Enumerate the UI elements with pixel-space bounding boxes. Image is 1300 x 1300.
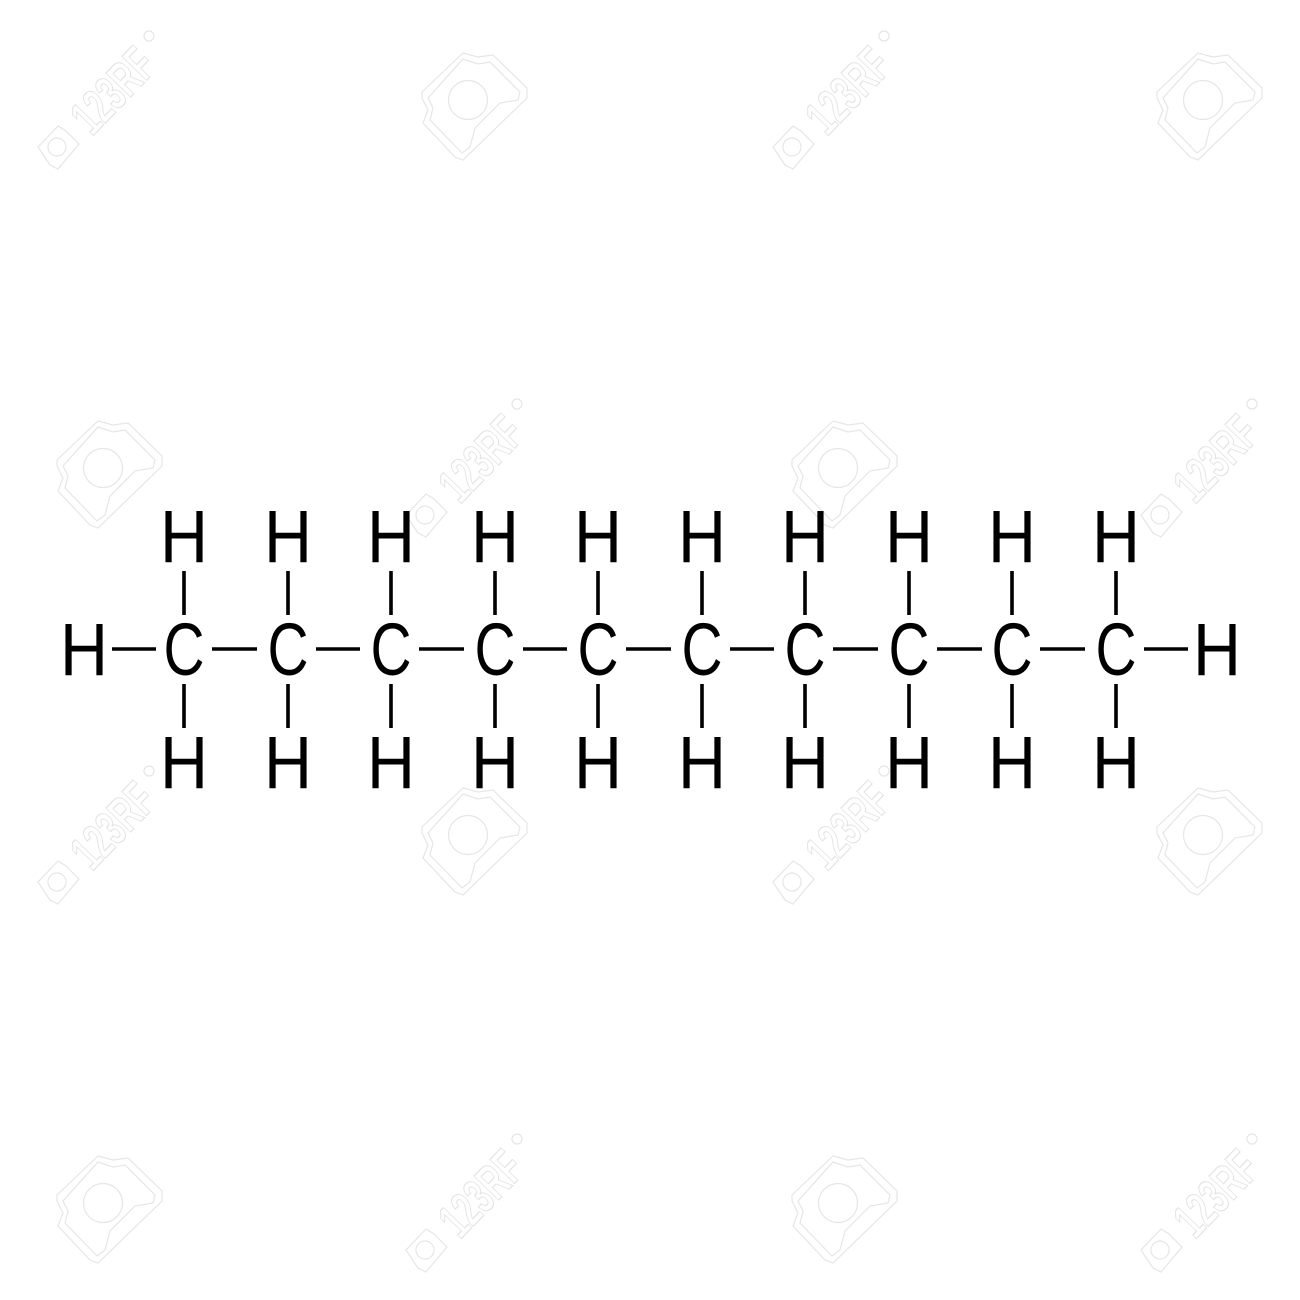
bottom hydrogen row	[160, 721, 1140, 804]
carbon chain row with terminal hydrogens: H	[1193, 608, 1241, 691]
carbon chain row with terminal hydrogens: C	[268, 608, 308, 691]
top hydrogen row: H	[988, 495, 1036, 578]
watermark: egg row 3 centre	[422, 788, 527, 895]
top hydrogen row: H	[471, 495, 519, 578]
bottom hydrogen row: H	[574, 721, 622, 804]
bonds	[112, 571, 1188, 728]
bottom hydrogen row: H	[471, 721, 519, 804]
watermark: wordmark row 2 centre	[406, 399, 535, 537]
watermark: egg far top right	[1157, 53, 1262, 160]
watermark: wordmark top right	[773, 31, 902, 169]
top hydrogen row: H	[264, 495, 312, 578]
watermark: wordmark row 3 right: 123RF	[795, 772, 902, 880]
watermark: wordmark row 3 left: 123RF	[60, 772, 167, 880]
top hydrogen row: H	[781, 495, 829, 578]
carbon chain row with terminal hydrogens: C	[1096, 608, 1136, 691]
watermark: egg row 3 far right	[1157, 788, 1262, 895]
bottom hydrogen row: H	[988, 721, 1036, 804]
carbon chain row with terminal hydrogens: C	[578, 608, 618, 691]
carbon chain row with terminal hydrogens: H	[60, 608, 108, 691]
watermark: wordmark top left	[38, 31, 167, 169]
bottom hydrogen row: H	[885, 721, 933, 804]
bottom hydrogen row: H	[678, 721, 726, 804]
watermark: wordmark row 2 far right	[1141, 399, 1270, 537]
top hydrogen row	[160, 495, 1140, 578]
bottom hydrogen row: H	[264, 721, 312, 804]
carbon chain row with terminal hydrogens	[60, 608, 1241, 691]
watermark: wordmark row 4 far right	[1141, 1134, 1270, 1272]
watermark: wordmark row 4 centre: 123RF	[428, 1140, 535, 1248]
bottom hydrogen row: H	[1092, 721, 1140, 804]
carbon chain row with terminal hydrogens: C	[370, 608, 412, 691]
watermark: wordmark row 3 right	[773, 766, 902, 904]
carbon chain row with terminal hydrogens: C	[682, 608, 722, 691]
top hydrogen row: H	[367, 495, 415, 578]
carbon chain row with terminal hydrogens: C	[164, 608, 204, 691]
carbon chain row with terminal hydrogens: C	[992, 608, 1032, 691]
watermark: wordmark top right: 123RF	[795, 37, 902, 145]
carbon chain row with terminal hydrogens: C	[888, 608, 930, 691]
watermark: egg row 2 left	[57, 421, 162, 528]
top hydrogen row: H	[678, 495, 726, 578]
bottom hydrogen row: H	[367, 721, 415, 804]
watermark: egg row 4 right	[792, 1156, 897, 1263]
top hydrogen row: H	[885, 495, 933, 578]
top hydrogen row: H	[1092, 495, 1140, 578]
carbon chain row with terminal hydrogens: C	[474, 608, 516, 691]
decane structural formula	[60, 495, 1241, 804]
top hydrogen row: H	[160, 495, 208, 578]
watermark: egg row 2 right	[792, 421, 897, 528]
top hydrogen row: H	[574, 495, 622, 578]
watermark: wordmark row 2 centre: 123RF	[428, 405, 535, 513]
watermark: wordmark row 3 left	[38, 766, 167, 904]
bottom hydrogen row: H	[160, 721, 208, 804]
carbon chain row with terminal hydrogens: C	[784, 608, 826, 691]
bottom hydrogen row: H	[781, 721, 829, 804]
watermark: egg top centre	[422, 53, 527, 160]
watermark: wordmark row 4 centre	[406, 1134, 535, 1272]
watermark: wordmark top left: 123RF	[60, 37, 167, 145]
watermark: egg row 4 left	[57, 1156, 162, 1263]
